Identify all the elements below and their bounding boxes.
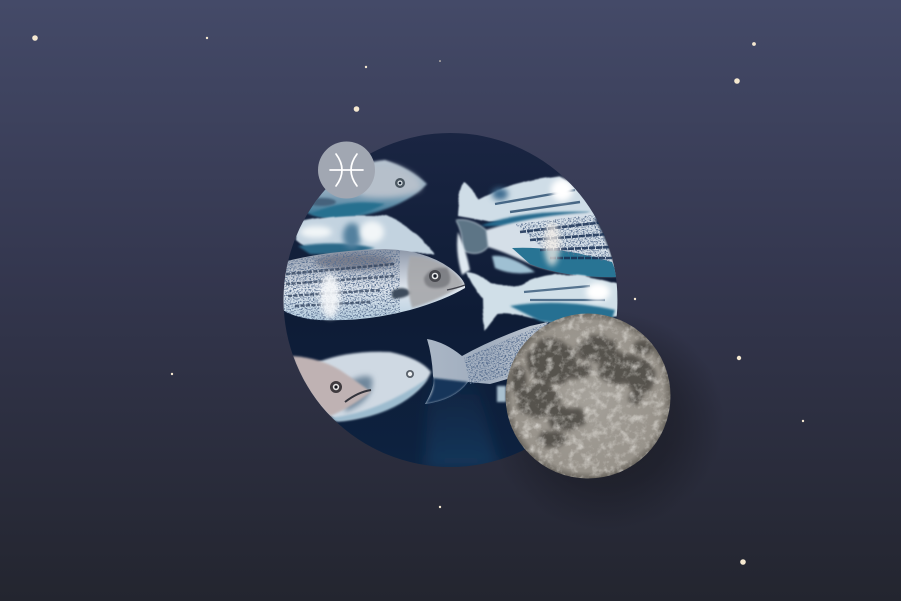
fish: bottom pair: [292, 352, 431, 421]
fish: top right: [457, 176, 600, 226]
stars: [32, 35, 804, 565]
light ray in water: [423, 394, 500, 467]
fish: top left: [305, 160, 427, 219]
fish: second left, blurred: [295, 215, 435, 254]
moon maria dark patches: [511, 336, 656, 447]
fish: tail fish lower centre: [425, 322, 548, 404]
photo disc: school of fish: [283, 133, 619, 470]
moon: [505, 313, 671, 479]
small fin between right fish: [492, 256, 535, 273]
icon: Pisces zodiac badge: [318, 142, 375, 198]
fish: large centre left: [283, 249, 465, 320]
fish: middle right: [456, 212, 618, 277]
moon cast shadow: [488, 310, 724, 530]
fish: lower right: [466, 272, 618, 331]
